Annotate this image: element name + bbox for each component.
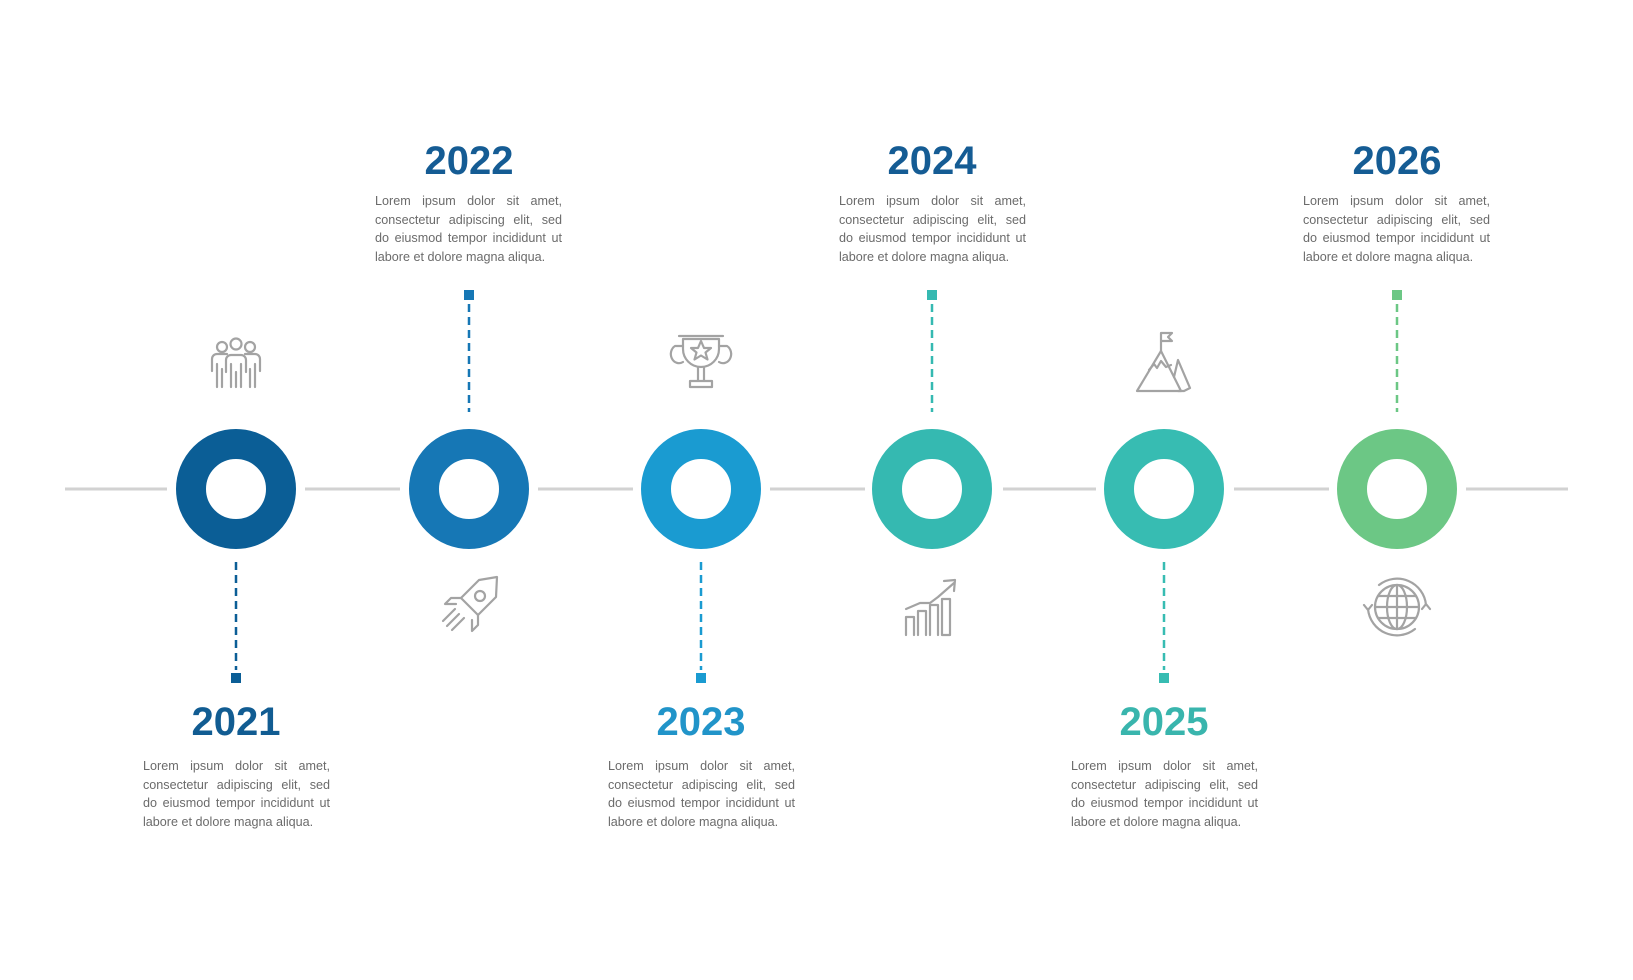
connector 2024 (927, 290, 937, 412)
icon: trophy (671, 336, 731, 387)
text 2026: Lorem ipsum dolor sit amet, consectetur adipiscing elit, sed do eiusmod tempor incididunt ut labore et dolore magna aliqua. (1303, 194, 1490, 264)
icon: growth chart (906, 580, 955, 635)
connector 2022 (464, 290, 474, 412)
text 2021: Lorem ipsum dolor sit amet, consectetur adipiscing elit, sed do eiusmod tempor incididunt ut labore et dolore magna aliqua. (143, 759, 330, 829)
ring 2022 (424, 444, 514, 534)
ring 2025 (1119, 444, 1209, 534)
icon: rocket (443, 577, 497, 631)
year 2023: 2023 (656, 700, 745, 744)
icon: team (212, 338, 260, 387)
text 2022: Lorem ipsum dolor sit amet, consectetur adipiscing elit, sed do eiusmod tempor incididunt ut labore et dolore magna aliqua. (375, 194, 562, 264)
icon: mountain flag (1137, 333, 1190, 391)
year 2021: 2021 (192, 700, 280, 744)
connector 2023 (696, 562, 706, 683)
ring 2023 (656, 444, 746, 534)
icon: globe (1364, 579, 1430, 635)
connector 2021 (231, 562, 241, 683)
connector 2026 (1392, 290, 1402, 412)
ring 2021 (191, 444, 281, 534)
year 2024: 2024 (888, 139, 976, 183)
ring 2024 (887, 444, 977, 534)
ring 2026 (1352, 444, 1442, 534)
text 2023: Lorem ipsum dolor sit amet, consectetur adipiscing elit, sed do eiusmod tempor incididunt ut labore et dolore magna aliqua. (608, 759, 795, 829)
year 2022: 2022 (424, 139, 513, 183)
text 2025: Lorem ipsum dolor sit amet, consectetur adipiscing elit, sed do eiusmod tempor incididunt ut labore et dolore magna aliqua. (1071, 759, 1258, 829)
connector 2025 (1159, 562, 1169, 683)
text 2024: Lorem ipsum dolor sit amet, consectetur adipiscing elit, sed do eiusmod tempor incididunt ut labore et dolore magna aliqua. (839, 194, 1026, 264)
year 2025: 2025 (1120, 700, 1208, 744)
year 2026: 2026 (1352, 139, 1441, 183)
